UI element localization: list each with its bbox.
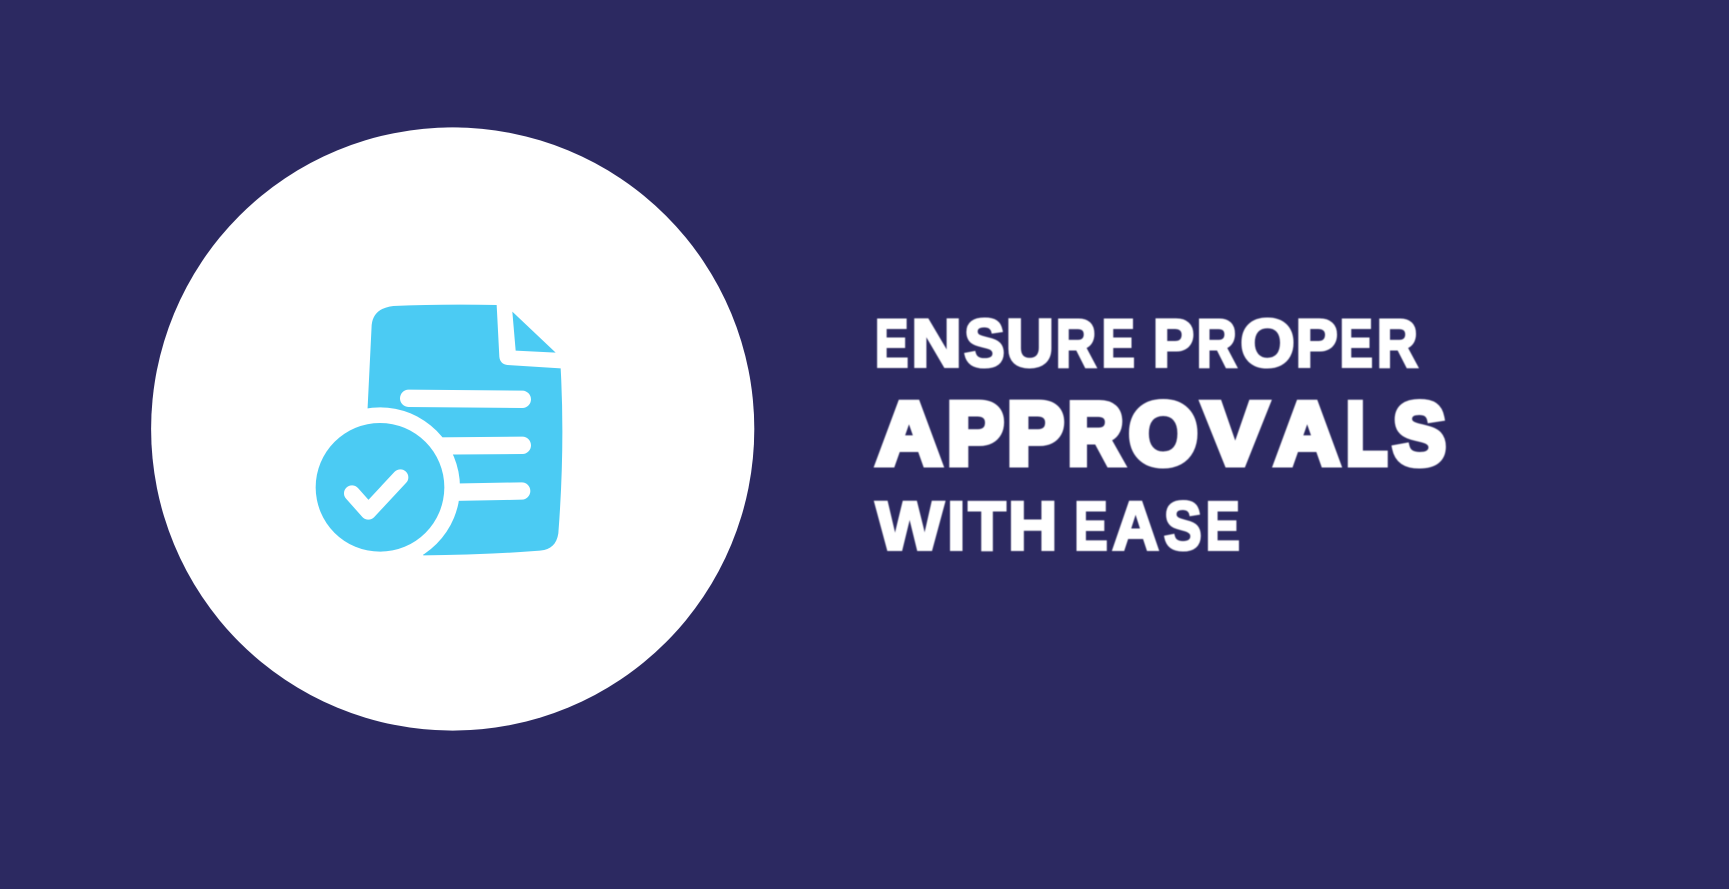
- heading line 1: R: [1196, 306, 1237, 382]
- heading line 2: A: [1275, 384, 1340, 483]
- heading text: [875, 306, 1446, 564]
- heading line 3: S: [1164, 488, 1202, 564]
- heading line 2: A: [876, 384, 942, 483]
- heading line 2: P: [1007, 384, 1064, 483]
- heading line 2: V: [1203, 384, 1267, 483]
- heading line 1: E: [1340, 306, 1373, 382]
- text lines: [409, 398, 522, 492]
- heading line 1: U: [1006, 306, 1054, 382]
- heading line 2: R: [1068, 384, 1123, 483]
- heading line 1: N: [911, 306, 962, 382]
- badge: [316, 423, 444, 552]
- heading line 3: E: [1074, 488, 1108, 564]
- heading line 2: L: [1346, 384, 1387, 483]
- white circle panel: [151, 127, 754, 731]
- badge ring: [300, 407, 460, 567]
- heading line 1: R: [1056, 306, 1096, 382]
- heading line 2: O: [1129, 384, 1198, 483]
- icon: document with check badge: [300, 305, 562, 567]
- heading line 1: S: [964, 306, 1005, 382]
- heading line 1: E: [1102, 306, 1135, 382]
- heading line 1: P: [1296, 306, 1338, 382]
- heading line 1: P: [1153, 306, 1194, 382]
- heading line 3: W: [876, 488, 945, 564]
- heading line 2: P: [947, 384, 1004, 483]
- heading line 3: A: [1112, 488, 1159, 564]
- folded corner: [512, 312, 556, 353]
- check mark: [352, 477, 400, 512]
- heading line 1: R: [1377, 306, 1418, 382]
- heading line 1: O: [1240, 306, 1295, 382]
- document body: [367, 305, 562, 555]
- heading line 3: T: [968, 488, 1006, 564]
- heading line 3: H: [1008, 488, 1058, 564]
- heading line 3: I: [947, 488, 966, 564]
- heading line 1: E: [875, 306, 908, 382]
- heading line 3: E: [1206, 488, 1240, 564]
- heading line 2: S: [1393, 384, 1446, 483]
